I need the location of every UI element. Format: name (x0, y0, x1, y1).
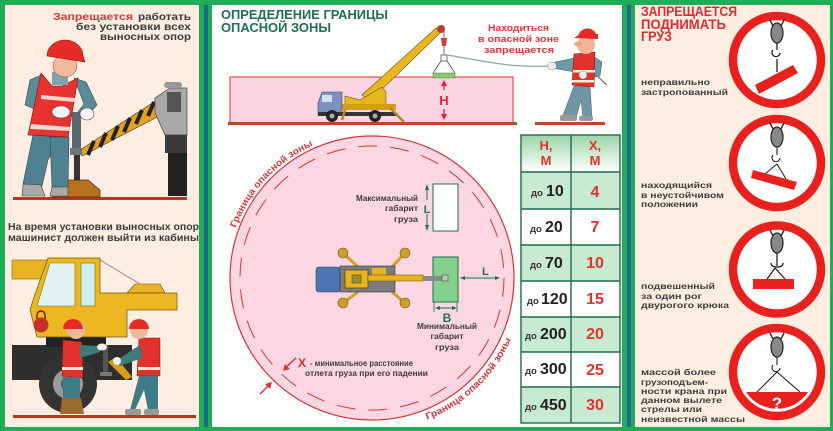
text: operator must leave the cab: машинист должен выйти из кабины (8, 232, 199, 244)
caption: unstable position (641, 180, 724, 209)
caption: overweight or unknown mass: массой более (641, 367, 716, 377)
heading: forbidden to lift load: ЗАПРЕЩАЕТСЯ (641, 4, 737, 19)
maximum load footprint: Максимальный (356, 193, 418, 203)
table: load height vs distance: до (531, 188, 543, 199)
caption: overweight or unknown mass: стрелы или (641, 404, 702, 414)
note: X minimum load fall distance: - минимальное расстояние (310, 358, 413, 368)
note: X minimum load fall distance: отлета груза при его падении (305, 368, 428, 378)
table: load height vs distance: 10 (546, 183, 564, 200)
minimum load footprint: габарит (430, 331, 464, 341)
maximum load footprint (356, 184, 458, 231)
heading: forbidden to lift load: ГРУЗ (641, 29, 672, 44)
side view: danger height band (228, 77, 605, 125)
caption: overweight or unknown mass: данном вылете (641, 395, 722, 405)
table: load height vs distance: до (525, 402, 537, 413)
table: load height vs distance (521, 135, 620, 423)
caption: overweight or unknown mass: ности крана при (641, 386, 727, 396)
minimum load footprint (417, 257, 477, 352)
heading: do not work without outriggers: Запрещается (53, 11, 133, 23)
table: load height vs distance: 7 (591, 219, 600, 236)
warning text: being in danger zone is forbidden: в опасной зоне (478, 34, 559, 45)
table: load height vs distance: 20 (586, 326, 604, 343)
table: load height vs distance: Х, (589, 138, 601, 153)
illustration: worker holding guide rope (447, 28, 607, 121)
heading: do not work without outriggers: выносных опор (100, 32, 191, 43)
caption: hung by one horn of double hook (641, 281, 729, 310)
heading: forbidden to lift load: ПОДНИМАТЬ (641, 17, 726, 32)
caption: unstable position: в неустойчивом (641, 190, 724, 200)
illustration: crane cab with two workers (12, 258, 196, 418)
illustration: worker at outrigger jack (13, 40, 187, 200)
dimension arrow L: L (482, 266, 489, 278)
height marker H (439, 80, 449, 120)
caption: improperly slung: застропованный (641, 87, 728, 97)
warning text: being in danger zone is forbidden: Находиться (488, 23, 549, 34)
table: load height vs distance: 450 (540, 397, 567, 414)
table: load height vs distance: 300 (540, 361, 567, 378)
table: load height vs distance: до (527, 296, 539, 307)
icon: prohibition sign, double hook (733, 226, 821, 314)
icon: prohibition sign, unknown mass: ? (772, 394, 782, 413)
icon: prohibition sign, tilted load (733, 16, 821, 104)
table: load height vs distance: 70 (545, 255, 563, 272)
caption: unstable position: положении (641, 199, 698, 209)
table: load height vs distance: 200 (540, 326, 567, 343)
caption: improperly slung (641, 77, 728, 97)
crane plan view (316, 248, 423, 308)
minimum load footprint: груза (435, 342, 459, 352)
table: load height vs distance: 15 (586, 291, 604, 308)
maximum load footprint: груза (394, 214, 418, 224)
table: load height vs distance: 120 (541, 291, 568, 308)
icon: prohibition sign, unknown mass (733, 328, 821, 416)
note: X minimum load fall distance: Х (298, 356, 306, 370)
table: load height vs distance: М (590, 153, 600, 168)
maximum load footprint: L (424, 204, 431, 216)
caption: overweight or unknown mass: грузоподъем- (641, 377, 708, 387)
dimension arrow L (460, 266, 500, 280)
panel: forbidden loads (635, 4, 830, 427)
heading: danger zone boundary: ОПРЕДЕЛЕНИЕ ГРАНИЦЫ (221, 8, 388, 22)
heading: do not work without outriggers (53, 11, 192, 43)
warning text: being in danger zone is forbidden: запрещается (484, 45, 554, 56)
curved label: boundary lower right: Граница опасной зоны (425, 338, 511, 420)
curved label: boundary upper left: Граница опасной зоны (230, 141, 312, 228)
caption: improperly slung: неправильно (641, 77, 710, 87)
table: load height vs distance: М (541, 153, 551, 168)
note: X minimum load fall distance (260, 356, 428, 394)
caption: overweight or unknown mass (641, 367, 745, 424)
table: load height vs distance: 20 (545, 219, 563, 236)
illustration: truck crane side view (318, 25, 455, 122)
table: load height vs distance: до (530, 260, 542, 271)
warning text: being in danger zone is forbidden (478, 23, 559, 56)
panel: outrigger rules (5, 5, 199, 427)
heading: danger zone boundary: ОПАСНОЙ ЗОНЫ (221, 20, 331, 35)
table: load height vs distance: 10 (586, 255, 604, 272)
plan view: danger zone circle (230, 136, 514, 420)
caption: hung by one horn of double hook: за один рог (641, 291, 703, 301)
minimum load footprint: Минимальный (417, 321, 477, 331)
table: load height vs distance: до (530, 224, 542, 235)
caption: hung by one horn of double hook: двурогого крюка (641, 300, 729, 310)
text: operator must leave the cab (8, 222, 199, 244)
caption: overweight or unknown mass: неизвестной массы (641, 414, 745, 424)
text: operator must leave the cab: На время установки выносных опор (8, 222, 199, 233)
panel: danger zone definition (212, 5, 622, 427)
height marker H: Н (439, 93, 449, 108)
table: load height vs distance: 30 (586, 397, 604, 414)
icon: prohibition sign, unstable load (733, 119, 821, 207)
minimum load footprint: В (443, 311, 452, 325)
table: load height vs distance: до (525, 331, 537, 342)
heading: danger zone boundary (221, 8, 388, 35)
heading: do not work without outriggers: без установки всех (76, 21, 192, 33)
heading: do not work without outriggers: работать (138, 11, 191, 23)
caption: unstable position: находящийся (641, 180, 712, 190)
table: load height vs distance: до (525, 366, 537, 377)
table: load height vs distance: Н, (540, 138, 552, 153)
maximum load footprint: габарит (385, 203, 418, 213)
caption: hung by one horn of double hook: подвешенный (641, 281, 715, 291)
table: load height vs distance: 4 (591, 184, 600, 201)
table: load height vs distance: 25 (586, 362, 604, 379)
heading: forbidden to lift load (641, 4, 737, 44)
